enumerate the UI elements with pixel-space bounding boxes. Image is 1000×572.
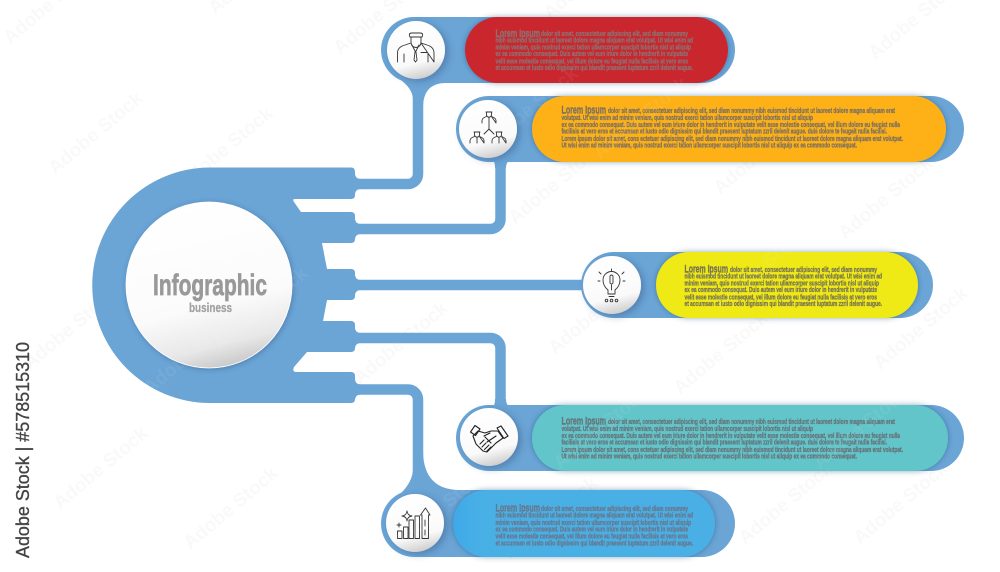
step 3 blue capsule [581,252,933,318]
step 1 text: velit esse molestie consequat, vel illum dolore eu feugiat nulla facilisis at vero eros [496,56,688,65]
background watermark: Adobe Stock [175,103,278,194]
step 4 text: Lorem Ipsum [562,416,606,428]
step 3 text [684,264,882,308]
connectors from hub to pills [350,60,600,520]
step 5 text: ex ea commodo consequat. Duis autem vel eum iriure dolor in hendrerit in vulputate [496,525,688,534]
step 5 text: et accumsan et iusto odio dignissim qui blandit praesent luptatum zzril delenit augue. [496,538,693,547]
step 2 colored pill [532,96,946,162]
step 5 text: Lorem Ipsum [496,502,540,514]
step 2 text: volutpat. Ut wisi enim ad minim veniam, quis nostrud exerci tation ullamcorper suscipit lobortis nisl ut aliquip [562,113,813,122]
step 1 text: nibh euismod tincidunt ut laoreet dolore magna aliquam erat volutpat. Ut wisi enim ad [496,36,693,45]
hub body: blue rounded shape with five tabs [92,168,355,403]
step 1 icon disc [387,21,445,79]
step 4 colored pill [532,405,948,471]
background watermark: Adobe Stock [505,138,608,229]
step 4 text: volutpat. Ut wisi enim ad minim veniam, quis nostrud exerci tation ullamcorper suscipit lobortis nisl ut aliquip [562,424,813,433]
step 1 text [496,28,693,72]
foreground watermark: Adobe Stock [810,383,913,474]
step 3 icon disc [583,256,641,314]
background watermark: Adobe Stock [850,458,953,549]
background watermark: Adobe Stock [710,108,813,199]
connector fillets [355,70,510,500]
title: Infographic [153,269,267,302]
step 3 text: velit esse molestie consequat, vel illum dolore eu feugiat nulla facilisis at vero eros [684,292,877,301]
icon: rising bar chart [397,508,430,538]
background watermark: Adobe Stock [180,463,283,554]
icon: light bulb [598,269,625,302]
step 5 blue capsule [381,490,735,557]
step 1 text: dolor sit amet, consectetuer adipiscing elit, sed diam nonummy [541,29,688,38]
step 1 text: minim veniam, quis nostrud exerci tation ullamcorper suscipit lobortis nisl ut aliquip [496,42,691,51]
main circle [126,202,292,368]
step 5 colored pill [453,490,715,557]
background watermark: Adobe Stock [20,283,123,374]
foreground watermark: Adobe Stock [480,63,583,154]
panel: step 1 red [381,17,735,83]
step 3 colored pill [656,252,918,318]
step 2 text: Lorem Ipsum [562,104,606,116]
step 4 icon disc [460,408,518,466]
background watermark: Adobe Stock [50,423,153,514]
step 5 text: nibh euismod tincidunt ut laoreet dolore magna aliquam erat volutpat. Ut wisi enim ad [496,511,693,520]
background watermark: Adobe Stock [350,298,453,389]
step 3 text: dolor sit amet, consectetuer adipiscing elit, sed diam nonummy [730,265,877,274]
stock credit: Adobe Stock | #578515310 [13,342,33,558]
foreground watermark: Adobe Stock [550,383,653,474]
foreground watermark: Adobe Stock [140,308,243,399]
icon: three connected people [470,112,506,143]
step 3 text: ex ea commodo consequat. Duis autem vel eum iriure dolor in hendrerit in vulputate [684,285,877,294]
step 5 text: dolor sit amet, consectetuer adipiscing elit, sed diam nonummy [541,504,688,513]
background watermark: Adobe Stock [835,153,938,244]
background watermark: Adobe Stock [870,283,973,374]
step 4 blue capsule [456,405,964,471]
background watermark: Adobe Stock [45,88,148,179]
foreground watermark: Adobe Stock [210,263,313,354]
step 3 text: Lorem Ipsum [684,264,728,276]
foreground watermark [140,63,913,554]
step 3 text: minim veniam, quis nostrud exerci tation ullamcorper suscipit lobortis nisl ut aliquip [684,278,879,287]
icon: handshake [470,426,508,452]
step 1 colored pill [465,17,728,83]
step 5 text: velit esse molestie consequat, vel illum dolore eu feugiat nulla facilisis at vero eros [496,532,688,541]
background watermark: Adobe Stock [735,458,838,549]
step 5 text [496,502,693,547]
step 2 icon disc [459,100,517,158]
step 5 text: minim veniam, quis nostrud exerci tation ullamcorper suscipit lobortis nisl ut aliquip [496,518,691,527]
step 4 text [562,416,903,460]
foreground watermark: Adobe Stock [710,223,813,314]
step 1 text: et accumsan et iusto odio dignissim qui blandit praesent luptatum zzril delenit augue. [496,63,693,72]
step 4 text: Ut wisi enim ad minim veniam, quis nostrud exerci tation ullamcorper suscipit lobortis nisl ut aliquip ex ea commodo consequat. [562,452,857,460]
background watermark: Adobe Stock [500,473,603,564]
icon: person with tie [398,33,434,62]
background watermark: Adobe Stock [545,268,648,359]
subtitle: business [189,300,232,315]
foreground watermark: Adobe Stock [590,73,693,164]
step 3 text: nibh euismod tincidunt ut laoreet dolore magna aliquam erat volutpat. Ut wisi enim ad [684,271,882,280]
step 1 text: ex ea commodo consequat. Duis autem vel eum iriure dolor in hendrerit in vulputate [496,49,688,58]
step 3 text: et accumsan et iusto odio dignissim qui blandit praesent luptatum zzril delenit augue. [684,299,882,308]
step 2 text: Ut wisi enim ad minim veniam, quis nostrud exerci tation ullamcorper suscipit lobortis nisl ut aliquip ex ea commodo consequat. [562,140,857,150]
panel: step 4 teal [456,405,964,471]
background watermark: Adobe Stock [670,308,773,399]
panel: step 5 blue [381,490,735,557]
panel: step 2 orange [456,96,964,162]
step 2 text [562,104,903,150]
panel: step 3 yellow [581,252,933,318]
step 1 text: Lorem Ipsum [496,28,540,40]
step 5 icon disc [386,494,444,552]
step 1 blue capsule [381,17,735,83]
step 2 blue capsule [456,96,964,162]
foreground watermark: Adobe Stock [390,463,493,554]
